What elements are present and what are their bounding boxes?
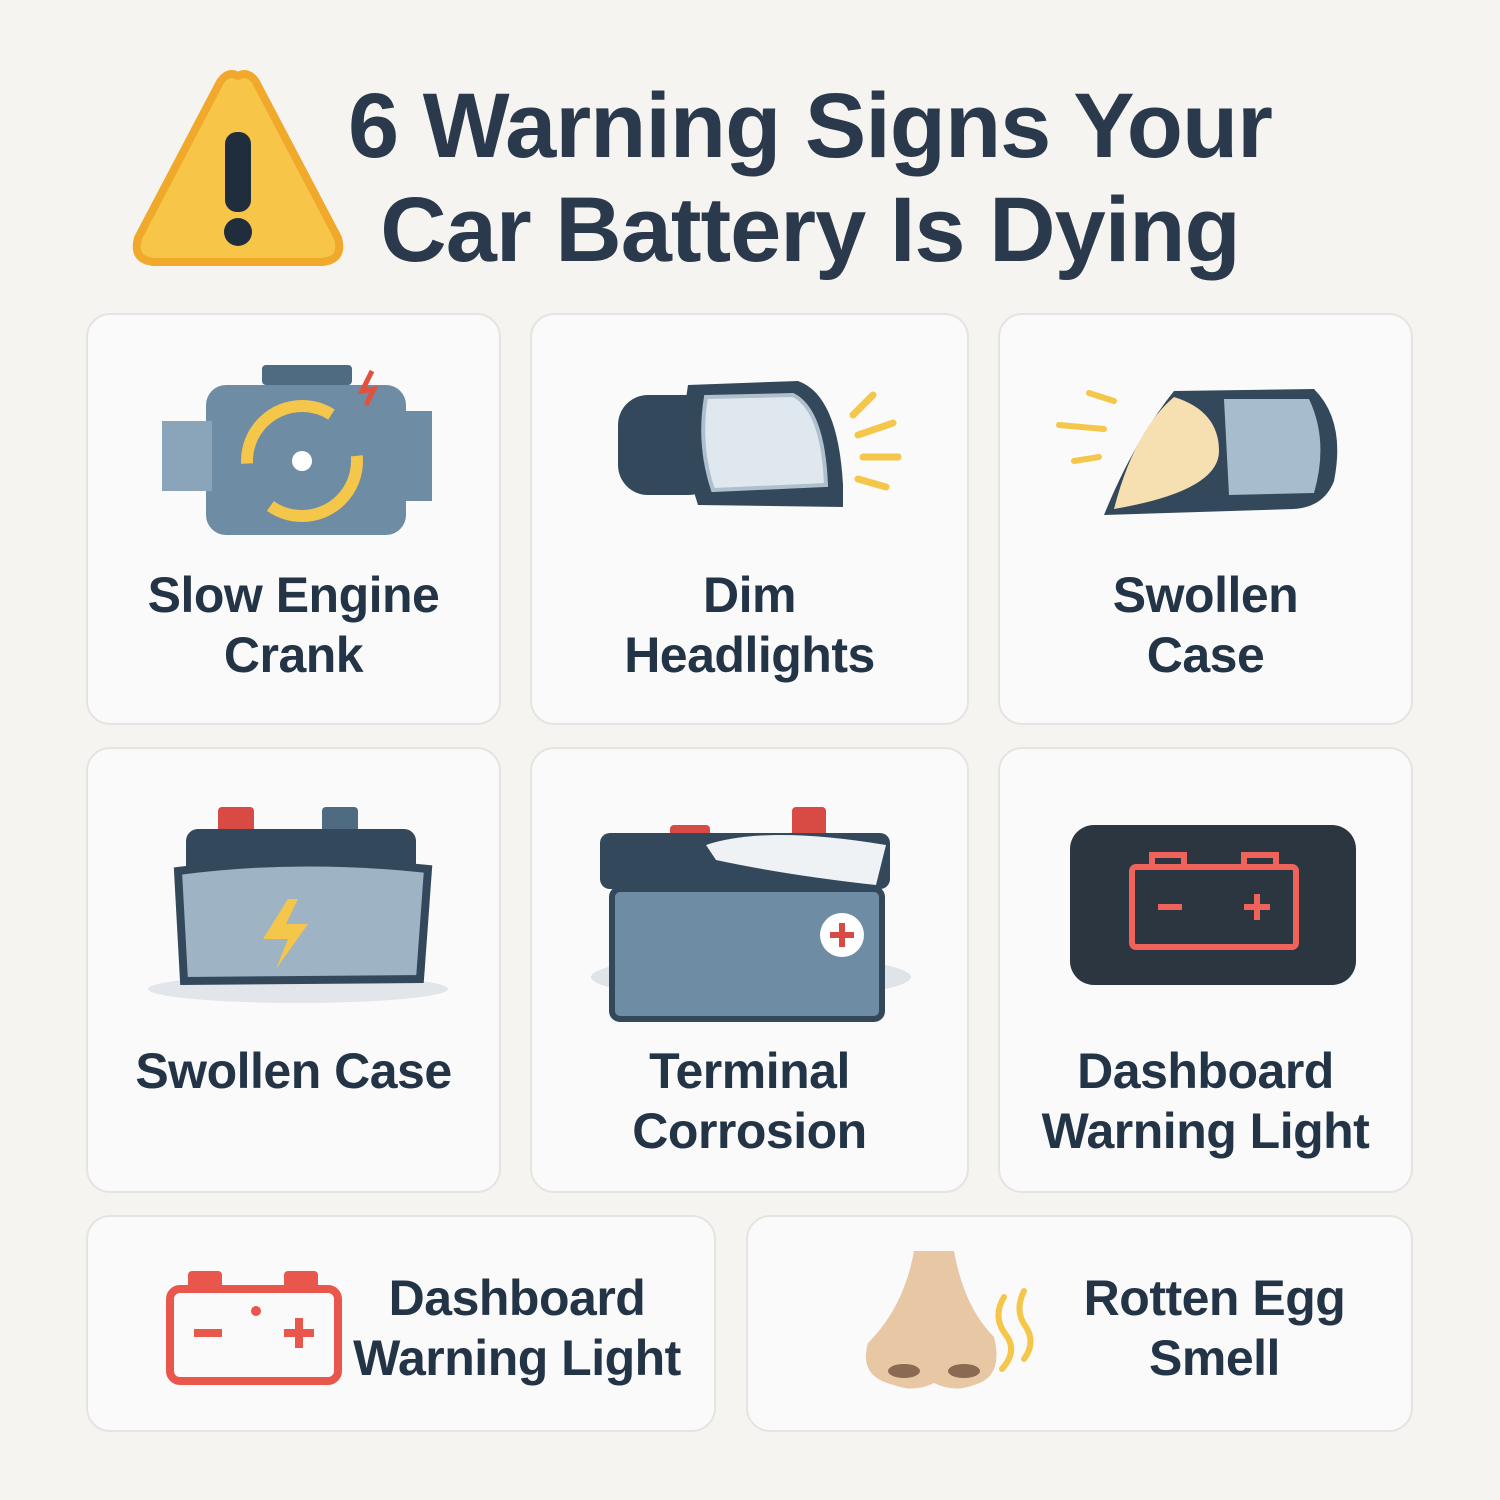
label	[1084, 1270, 1345, 1386]
label: Terminal	[649, 1043, 850, 1099]
label	[1042, 1043, 1370, 1159]
label	[148, 567, 439, 683]
label	[632, 1043, 867, 1159]
label: Rotten Egg	[1084, 1270, 1345, 1326]
icon: nose	[866, 1251, 1034, 1388]
label: Smell	[1149, 1330, 1280, 1386]
label	[624, 567, 875, 683]
panel: dashboard warning light (wide)	[86, 1215, 716, 1432]
icon: corroded battery	[591, 807, 911, 1022]
label: Dashboard	[389, 1270, 645, 1326]
icon: warning triangle	[132, 70, 344, 266]
title: Car Battery Is Dying	[380, 179, 1240, 281]
title: 6 Warning Signs Your	[348, 75, 1272, 177]
label: Warning Light	[1042, 1103, 1369, 1159]
panel: dashboard warning light (dark)	[998, 747, 1413, 1193]
icon: headlight	[618, 381, 902, 507]
label: Swollen Case	[135, 1043, 452, 1099]
label: Crank	[224, 627, 363, 683]
panel: terminal corrosion	[530, 747, 969, 1193]
label: Dim	[703, 567, 796, 623]
label: Headlights	[624, 627, 875, 683]
icon: headlight side	[1056, 389, 1338, 515]
label: Swollen	[1113, 567, 1298, 623]
label	[353, 1270, 681, 1386]
label	[1113, 567, 1298, 683]
icon: dashboard battery light	[1070, 825, 1356, 985]
label: Warning Light	[353, 1330, 681, 1386]
label: Corrosion	[632, 1103, 867, 1159]
panel: dim headlights	[530, 313, 969, 725]
title	[348, 75, 1272, 281]
panel: rotten egg smell	[746, 1215, 1413, 1432]
panel: slow engine crank	[86, 313, 501, 725]
label: Case	[1147, 627, 1264, 683]
icon: engine	[162, 365, 432, 535]
panel: swollen case (headlight)	[998, 313, 1413, 725]
label: Dashboard	[1077, 1043, 1334, 1099]
icon: swollen battery	[148, 807, 448, 1003]
label: Slow Engine	[148, 567, 439, 623]
panel: swollen case battery	[86, 747, 501, 1193]
icon: battery outline	[166, 1271, 342, 1385]
